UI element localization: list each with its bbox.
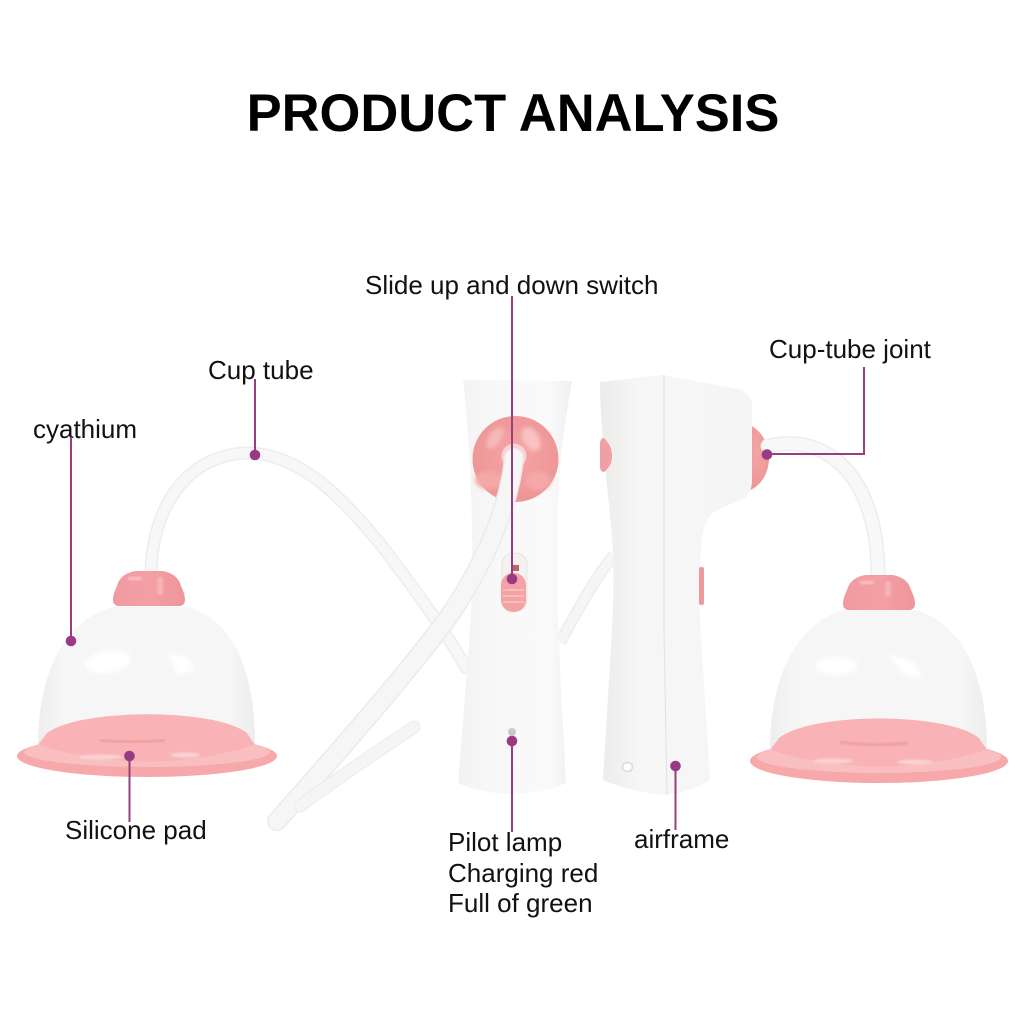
pad rim highlights (813, 758, 933, 764)
callout: silicone pad: Silicone pad (65, 815, 207, 845)
pad rim highlights (79, 752, 200, 760)
callout: cup-tube joint: Cup-tube joint (769, 334, 932, 364)
right tube (768, 444, 878, 575)
slide switch (501, 573, 526, 612)
left cup (17, 571, 277, 777)
side switch upper (600, 438, 612, 472)
right cup (750, 575, 1008, 783)
flange (750, 739, 1008, 783)
device side view (600, 375, 752, 795)
tube socket (502, 444, 526, 468)
pink pad (38, 714, 255, 762)
device side view joint (745, 423, 769, 492)
knob highlights (475, 424, 551, 490)
device front view (458, 380, 572, 794)
callout: pilot lamp: Full of green (448, 888, 593, 918)
callout: pilot lamp: Charging red (448, 858, 598, 888)
callout: pilot lamp: Pilot lamp (448, 827, 562, 857)
callout: airframe: airframe (634, 824, 729, 854)
front tube (277, 458, 514, 821)
pad crease (840, 742, 907, 745)
callout: slide switch (365, 270, 658, 584)
callout: cup tube (208, 355, 314, 460)
pad crease (100, 740, 165, 742)
callout: slide switch: Slide up and down switch (365, 270, 658, 300)
callout: cup tube: Cup tube (208, 355, 314, 385)
round pink knob (472, 416, 558, 502)
dome highlights (84, 648, 195, 676)
callout: airframe (634, 761, 729, 854)
cap (113, 571, 185, 606)
dome (770, 610, 987, 765)
body seam (664, 375, 667, 794)
switch slot (502, 553, 527, 611)
pink pad (770, 718, 987, 766)
tube behind right body (560, 555, 614, 642)
pilot lamp dot (508, 728, 516, 736)
dome highlights (816, 655, 923, 678)
callout: cyathium: cyathium (33, 414, 137, 444)
left tube (151, 453, 466, 668)
callout: silicone pad (65, 751, 207, 845)
title: PRODUCT ANALYSIS (247, 84, 779, 143)
callout: pilot lamp (448, 736, 598, 918)
callout: cyathium (33, 414, 137, 646)
switch marker (512, 565, 519, 571)
cap (843, 575, 915, 610)
side hole (622, 762, 632, 772)
flange (17, 735, 277, 777)
side switch lower (699, 567, 704, 605)
dome (38, 607, 255, 760)
callout: cup-tube joint (762, 334, 932, 460)
